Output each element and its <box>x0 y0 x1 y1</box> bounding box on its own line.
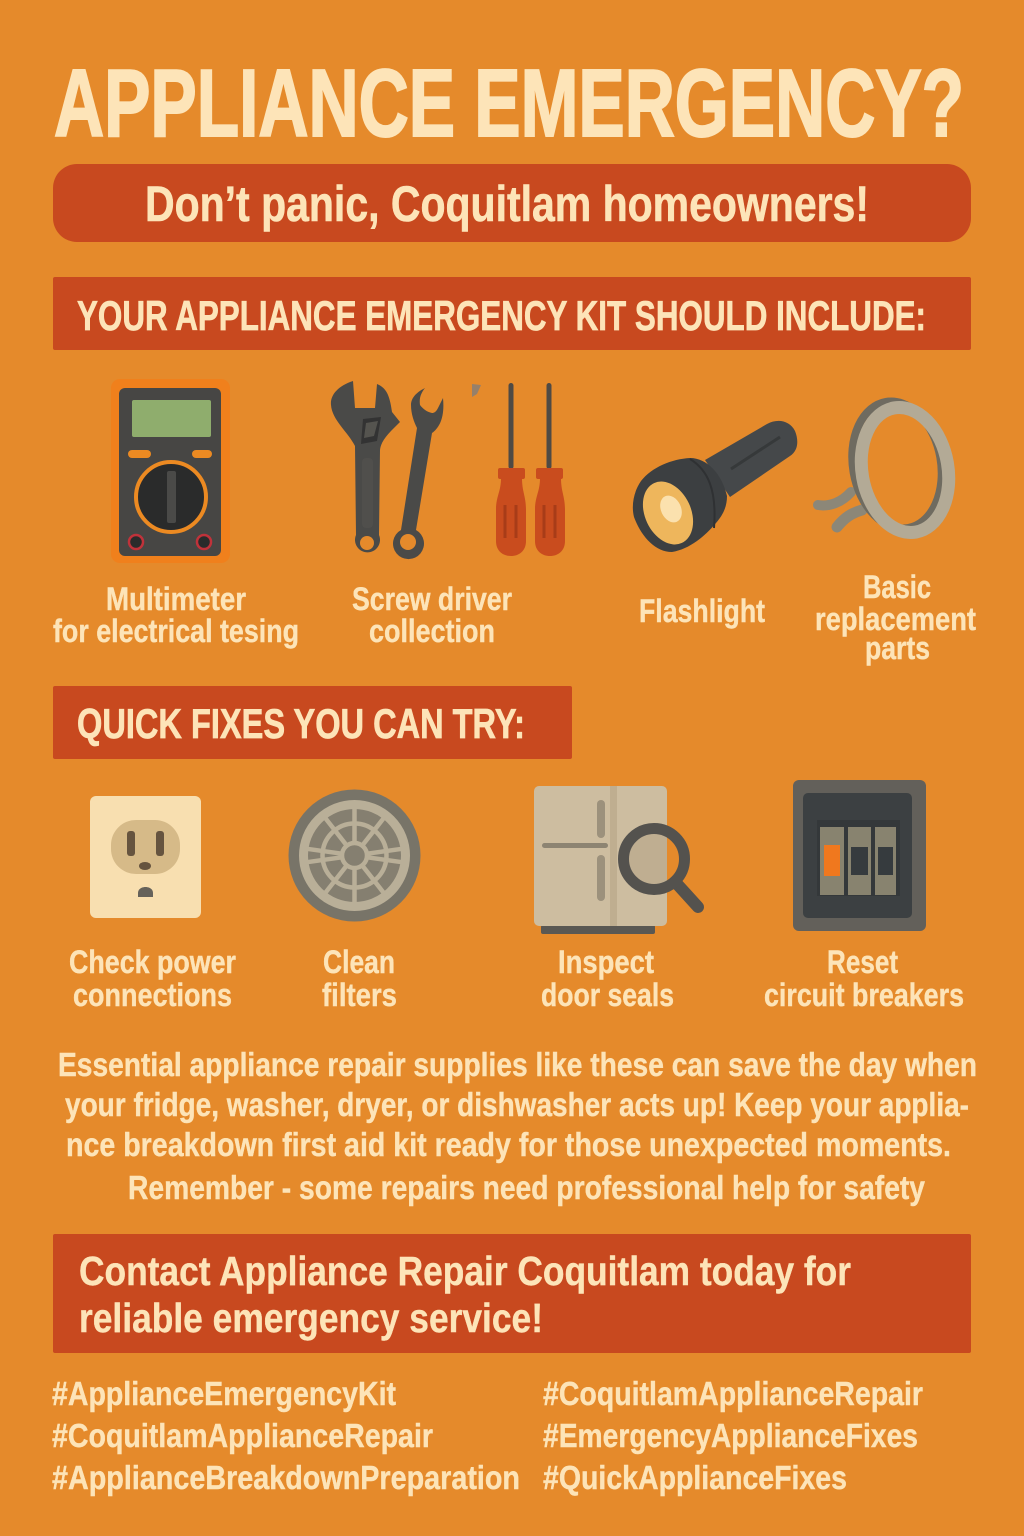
icon: screwdrivers <box>496 383 565 556</box>
label: screw driver <box>352 581 512 649</box>
label: inspect door seals: door seals <box>541 977 674 1013</box>
hashtags left: #ApplianceEmergencyKit <box>52 1375 396 1412</box>
icon: circuit breaker <box>793 780 926 931</box>
hashtags right: #EmergencyApplianceFixes <box>543 1417 918 1454</box>
paragraph <box>58 1046 977 1206</box>
label: check power <box>69 944 236 1013</box>
hashtags left: #ApplianceBreakdownPreparation <box>52 1459 520 1496</box>
label: inspect door seals: Inspect <box>558 944 654 980</box>
label: screw driver: collection <box>369 613 495 649</box>
label: multimeter: Multimeter <box>106 581 246 617</box>
hashtags right: #CoquitlamApplianceRepair <box>543 1375 923 1412</box>
label: check power: connections <box>73 977 232 1013</box>
call to action: Contact Appliance Repair Coquitlam today for <box>79 1248 851 1294</box>
label: replacement parts: Basic <box>863 569 931 605</box>
icon: multimeter <box>111 379 230 563</box>
label: replacement parts: replacement <box>815 601 976 637</box>
icon: flashlight <box>633 421 797 553</box>
label: screw driver: Screw driver <box>352 581 512 617</box>
label: flashlight: Flashlight <box>639 593 765 629</box>
fleck <box>472 384 481 397</box>
icon: filter <box>288 790 420 922</box>
icon: power outlet <box>90 796 201 918</box>
label: replacement parts: parts <box>865 630 930 666</box>
call to action <box>53 1234 971 1353</box>
heading: emergency kit <box>53 277 971 350</box>
label: clean filters <box>322 944 397 1013</box>
label: inspect door seals <box>541 944 674 1013</box>
label: replacement parts <box>815 569 976 666</box>
label: multimeter <box>53 581 299 649</box>
icon: fridge with magnifier <box>534 786 698 934</box>
hashtags left: #CoquitlamApplianceRepair <box>52 1417 433 1454</box>
label: reset breakers: Reset <box>827 944 898 980</box>
label: check power: Check power <box>69 944 236 980</box>
heading: quick fixes <box>53 686 572 759</box>
hashtags left <box>52 1375 520 1496</box>
banner: don't panic <box>53 164 971 242</box>
label: clean filters: filters <box>322 977 397 1013</box>
icon: replacement ring clamp <box>818 394 958 540</box>
call to action: reliable emergency service! <box>79 1295 543 1341</box>
icon: wrenches <box>331 381 443 559</box>
label: reset breakers <box>764 944 964 1013</box>
hashtags right: #QuickApplianceFixes <box>543 1459 847 1496</box>
label: multimeter: for electrical tesing <box>53 613 299 649</box>
label: reset breakers: circuit breakers <box>764 977 964 1013</box>
heading: quick fixes: QUICK FIXES YOU CAN TRY: <box>77 700 525 747</box>
label: clean filters: Clean <box>323 944 395 980</box>
banner: don't panic: Don’t panic, Coquitlam homeowners! <box>145 176 869 232</box>
hashtags right <box>543 1375 923 1496</box>
